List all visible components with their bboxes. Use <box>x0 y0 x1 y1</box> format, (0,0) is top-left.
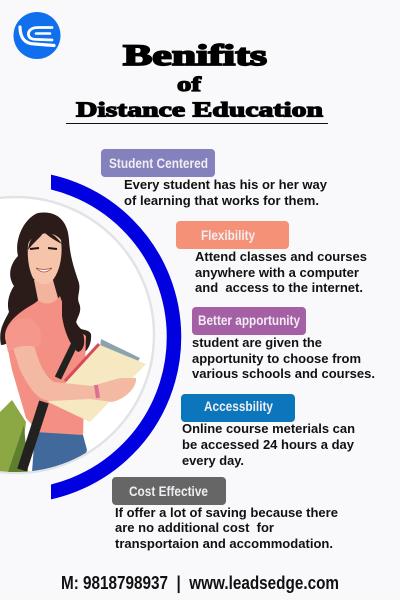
blue arc <box>51 174 182 500</box>
jeans <box>32 432 87 472</box>
panel: accessbility <box>181 394 355 468</box>
panel: flexibility: anywhere with a computer <box>195 265 359 280</box>
icon: company logo <box>14 12 60 59</box>
photo: student with books <box>0 213 146 472</box>
photo circle background <box>0 197 154 473</box>
panel: student centered: Every student has his or her way <box>124 177 328 192</box>
title: Distance Education <box>76 98 323 122</box>
title <box>76 39 323 122</box>
bracelet <box>96 385 98 398</box>
title: Benifits <box>123 39 267 72</box>
eyes and smile <box>30 248 57 249</box>
bag <box>0 400 26 472</box>
sleeve <box>5 336 34 352</box>
panel: accessbility: Accessbility <box>204 398 273 414</box>
title: of <box>177 72 202 96</box>
hair right lock over shoulder <box>62 302 84 352</box>
face <box>28 233 62 284</box>
panel: accessbility: Online course meterials can <box>182 421 355 436</box>
book <box>48 345 146 422</box>
panel: flexibility: and access to the internet. <box>195 280 363 295</box>
panel: better apportunity: apportunity to choose from <box>192 351 361 366</box>
strap <box>58 341 76 378</box>
panel: flexibility: Attend classes and courses <box>195 249 367 264</box>
panel: cost effective: transportaion and accommodation. <box>115 536 333 551</box>
panel: better apportunity: Better apportunity <box>198 312 300 328</box>
panel: cost effective: If offer a lot of saving because there <box>115 505 338 520</box>
panel: accessbility: be accessed 24 hours a day <box>182 437 355 452</box>
shirt <box>5 294 86 437</box>
panel: student centered: of learning that works for them. <box>124 193 319 208</box>
panel: accessbility: every day. <box>182 453 244 468</box>
panel: student centered <box>101 149 328 208</box>
panel: better apportunity: various schools and courses. <box>192 366 375 381</box>
panel: better apportunity <box>192 307 375 381</box>
panel: better apportunity: student are given the <box>192 335 322 350</box>
panel: cost effective <box>112 477 338 551</box>
footer contact line: M: 9818798937 | www.leadsedge.com <box>61 573 339 593</box>
panel: cost effective: are no additional cost for <box>115 520 274 535</box>
hair back <box>0 213 91 356</box>
arm <box>13 346 136 402</box>
panel: cost effective: Cost Effective <box>129 483 208 499</box>
panel: flexibility <box>176 221 367 295</box>
book back pages <box>100 339 140 361</box>
panel: flexibility: Flexibility <box>201 227 255 243</box>
neck and chest <box>34 280 58 304</box>
panel: student centered: Student Centered <box>109 155 208 171</box>
